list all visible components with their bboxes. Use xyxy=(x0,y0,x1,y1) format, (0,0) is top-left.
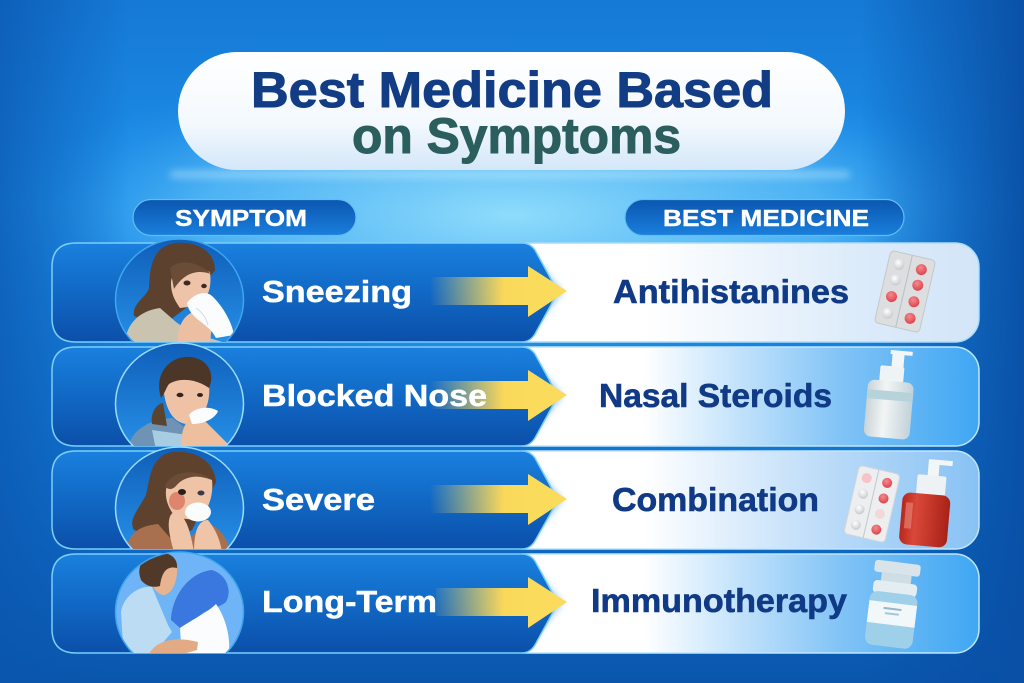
arrow xyxy=(430,474,567,525)
circle outline xyxy=(114,446,244,549)
left bar 3 xyxy=(52,451,558,549)
column header: best medicine xyxy=(625,200,904,236)
row 1: sneezing to antihistamines xyxy=(51,240,980,343)
circle outline xyxy=(114,342,244,446)
left bar 1 xyxy=(52,243,558,342)
medicine label: Antihistanines xyxy=(613,273,849,310)
row 3: severe to combination xyxy=(51,446,980,550)
portrait: man with blocked nose xyxy=(116,344,243,446)
title line 1: Best Medicine Based xyxy=(251,62,773,118)
right panel 4 xyxy=(500,554,979,653)
portrait: woman sneezing xyxy=(116,240,243,342)
title line 2: on Symptoms xyxy=(352,108,681,164)
circle outline xyxy=(114,239,244,342)
icon: vial xyxy=(864,559,922,650)
arrow xyxy=(430,266,567,317)
arrow xyxy=(436,577,567,628)
right panel 1 xyxy=(500,243,979,342)
row 4: long-term to immunotherapy xyxy=(51,551,980,654)
medicine label: Combination xyxy=(612,481,819,518)
medicine label: Nasal Steroids xyxy=(599,377,832,414)
circle outline xyxy=(114,551,244,653)
symptom label: Severe xyxy=(262,482,375,517)
portrait: patient being cared for xyxy=(116,552,243,653)
symptom label: Long-Term xyxy=(262,584,437,619)
icon: blister pack xyxy=(874,250,936,333)
right panel 2 xyxy=(500,347,979,446)
column header: symptom xyxy=(133,200,356,236)
medicine label: Immunotherapy xyxy=(591,582,848,619)
icon: pump bottle xyxy=(863,348,917,440)
icon: blister pack xyxy=(844,465,900,543)
hexagon glow 1 xyxy=(525,246,562,339)
portrait: woman with severe symptoms xyxy=(116,448,243,549)
arrow xyxy=(430,370,567,421)
row 2: blocked nose to nasal steroids xyxy=(51,342,980,447)
left bar 4 xyxy=(52,554,558,653)
hexagon glow 4 xyxy=(525,557,562,650)
symptom label: Blocked Nose xyxy=(262,378,487,413)
hexagon glow 2 xyxy=(525,350,562,443)
right panel 3 xyxy=(500,451,979,549)
column header: symptom: SYMPTOM xyxy=(175,205,307,231)
icon: red pump bottle xyxy=(899,457,954,548)
title pill xyxy=(178,52,845,170)
hexagon glow 3 xyxy=(525,454,562,546)
symptom label: Sneezing xyxy=(262,274,412,309)
left bar 2 xyxy=(52,347,558,446)
column header: best medicine: BEST MEDICINE xyxy=(663,205,869,231)
